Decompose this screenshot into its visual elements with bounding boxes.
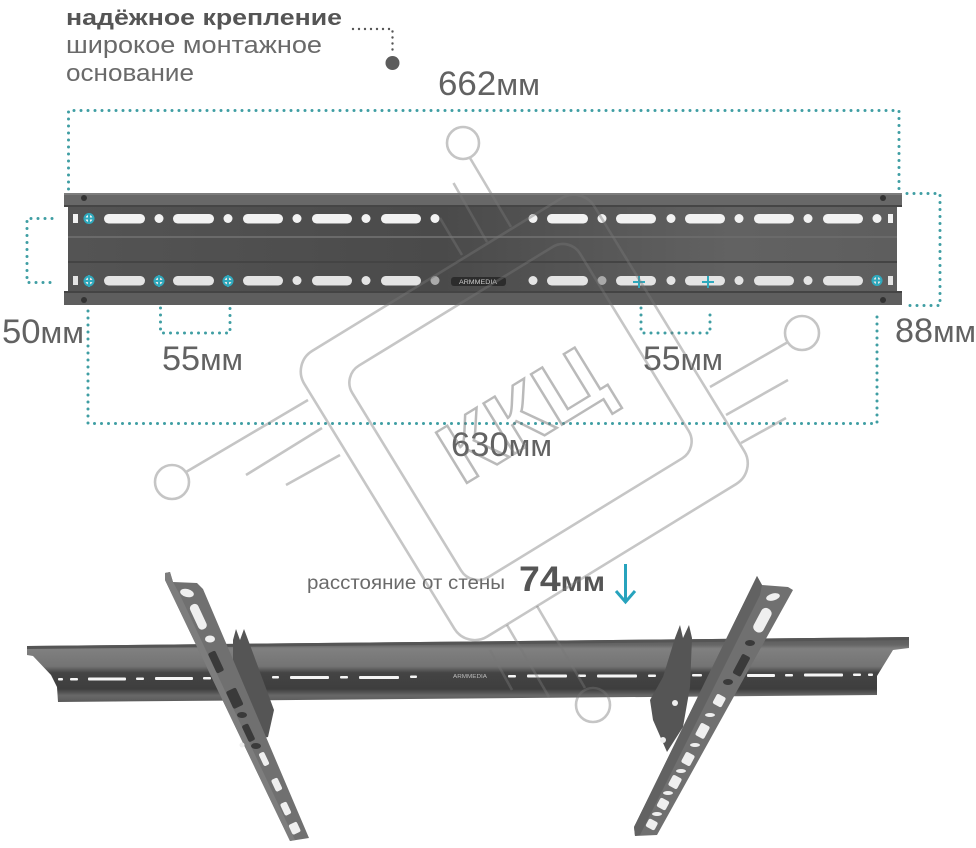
dimension 55 mm right: 55мм bbox=[643, 340, 723, 378]
watermark circle top bbox=[440, 127, 511, 255]
description text: основание bbox=[66, 60, 194, 87]
rail logo: ARMMEDIA bbox=[453, 674, 488, 680]
dimension 50 mm: 50мм bbox=[2, 313, 84, 351]
dimension 662 mm: 662мм bbox=[438, 65, 540, 103]
watermark frame outer bbox=[292, 186, 757, 649]
dimension 55 mm left bbox=[160, 308, 243, 378]
watermark frame inner bbox=[342, 237, 699, 587]
wall distance label bbox=[307, 560, 605, 599]
right fin plate bbox=[650, 625, 692, 752]
rail slots bbox=[58, 674, 873, 680]
left arm bbox=[165, 572, 309, 841]
wall distance label: расстояние от стены bbox=[307, 573, 505, 594]
brand plate bbox=[451, 277, 506, 286]
dimension 630 mm: 630мм bbox=[451, 426, 552, 464]
watermark circle bottom bbox=[490, 606, 610, 722]
dimension 88 mm bbox=[895, 194, 976, 350]
rail bbox=[27, 637, 909, 702]
heading bold line: надёжное крепление bbox=[66, 5, 342, 30]
brand plate: ARMMEDIA bbox=[459, 279, 498, 286]
mounting holes bbox=[73, 214, 893, 286]
right arm bbox=[634, 576, 793, 836]
callout connector bbox=[353, 29, 400, 70]
description text bbox=[66, 32, 322, 87]
dimension 55 mm left: 55мм bbox=[162, 340, 243, 378]
watermark circle right bbox=[710, 316, 819, 443]
description text: широкое монтажное bbox=[66, 32, 322, 59]
wall distance label: 74мм bbox=[519, 560, 605, 599]
heading: reliable mount bbox=[66, 5, 342, 87]
dimension 88 mm: 88мм bbox=[895, 312, 976, 350]
dimension 50 mm bbox=[2, 218, 84, 351]
dimension 630 mm bbox=[88, 311, 877, 464]
arrow: down bbox=[616, 564, 635, 602]
teal hole markers bbox=[84, 213, 882, 288]
dimension 55 mm right bbox=[641, 308, 723, 378]
side view: rail with arms bbox=[27, 572, 909, 841]
screws bbox=[81, 195, 886, 303]
watermark letters: ККЦ bbox=[422, 327, 624, 502]
wall plate bbox=[64, 193, 902, 305]
dimension 662 mm bbox=[68, 65, 899, 189]
watermark circle left bbox=[155, 400, 340, 499]
watermark bbox=[155, 127, 819, 722]
left fin plate bbox=[233, 629, 274, 739]
